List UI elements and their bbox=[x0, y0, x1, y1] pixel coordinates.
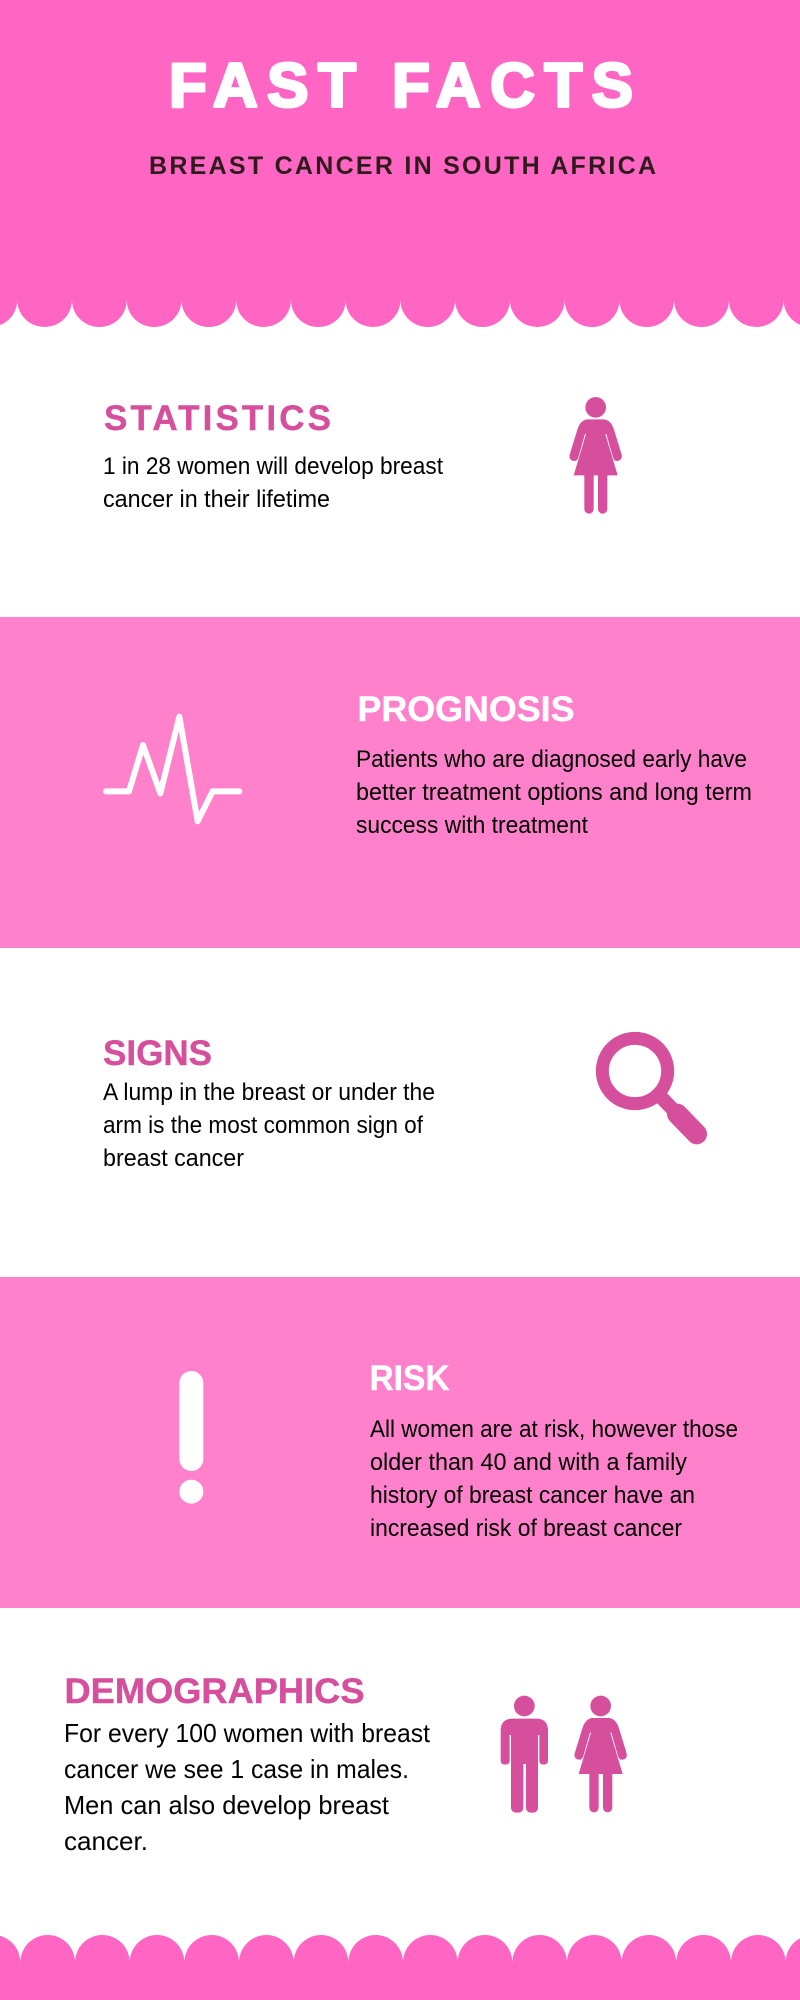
text: demographics body: For every 100 women with breast bbox=[64, 1718, 431, 1748]
icon: man bbox=[501, 1696, 548, 1813]
icon: exclamation mark bbox=[179, 1371, 203, 1504]
heading: prognosis: PROGNOSIS bbox=[358, 690, 574, 729]
icon: magnifying glass bbox=[602, 1038, 697, 1134]
icon: woman bbox=[569, 397, 622, 514]
text: prognosis body: Patients who are diagnosed early have bbox=[356, 746, 747, 773]
text: risk body: increased risk of breast cancer bbox=[370, 1515, 682, 1542]
text: risk body bbox=[370, 1416, 738, 1542]
panel: prognosis bbox=[0, 617, 800, 948]
panel: statistics bbox=[103, 397, 622, 514]
text: risk body: history of breast cancer have an bbox=[370, 1482, 695, 1509]
heading: demographics: DEMOGRAPHICS bbox=[64, 1672, 364, 1711]
text: prognosis body: success with treatment bbox=[356, 812, 588, 839]
panel: risk bbox=[0, 1277, 800, 1608]
text: signs body: A lump in the breast or under the bbox=[103, 1079, 435, 1106]
text: signs body: arm is the most common sign of bbox=[103, 1112, 423, 1139]
text: statistics body bbox=[103, 453, 443, 513]
text: prognosis body: better treatment options and long term bbox=[356, 779, 752, 806]
title: FAST FACTS bbox=[169, 52, 633, 120]
text: demographics body: Men can also develop breast bbox=[64, 1790, 390, 1820]
text: statistics body: cancer in their lifetime bbox=[103, 486, 330, 513]
text: risk body: All women are at risk, however those bbox=[370, 1416, 738, 1443]
panel: demographics bbox=[64, 1672, 627, 1856]
icon: heartbeat pulse bbox=[106, 717, 239, 821]
icon: woman bbox=[574, 1696, 627, 1812]
panel: signs bbox=[103, 1034, 697, 1172]
subtitle: BREAST CANCER IN SOUTH AFRICA bbox=[149, 152, 656, 180]
text: demographics body: cancer. bbox=[64, 1826, 148, 1856]
text: signs body: breast cancer bbox=[103, 1145, 244, 1172]
heading: signs: SIGNS bbox=[103, 1034, 212, 1073]
text: demographics body bbox=[64, 1718, 431, 1856]
text: statistics body: 1 in 28 women will develop breast bbox=[103, 453, 443, 480]
panel background: prognosis bbox=[0, 617, 800, 948]
text: demographics body: cancer we see 1 case in males. bbox=[64, 1754, 409, 1784]
header banner with scalloped edge bbox=[0, 0, 800, 327]
heading: risk: RISK bbox=[370, 1359, 450, 1398]
text: prognosis body bbox=[356, 746, 752, 839]
footer band with scalloped edge bbox=[0, 1935, 800, 2000]
heading: statistics: STATISTICS bbox=[104, 399, 331, 438]
text: signs body bbox=[103, 1079, 435, 1172]
text: risk body: older than 40 and with a family bbox=[370, 1449, 687, 1476]
panel background: risk bbox=[0, 1277, 800, 1608]
